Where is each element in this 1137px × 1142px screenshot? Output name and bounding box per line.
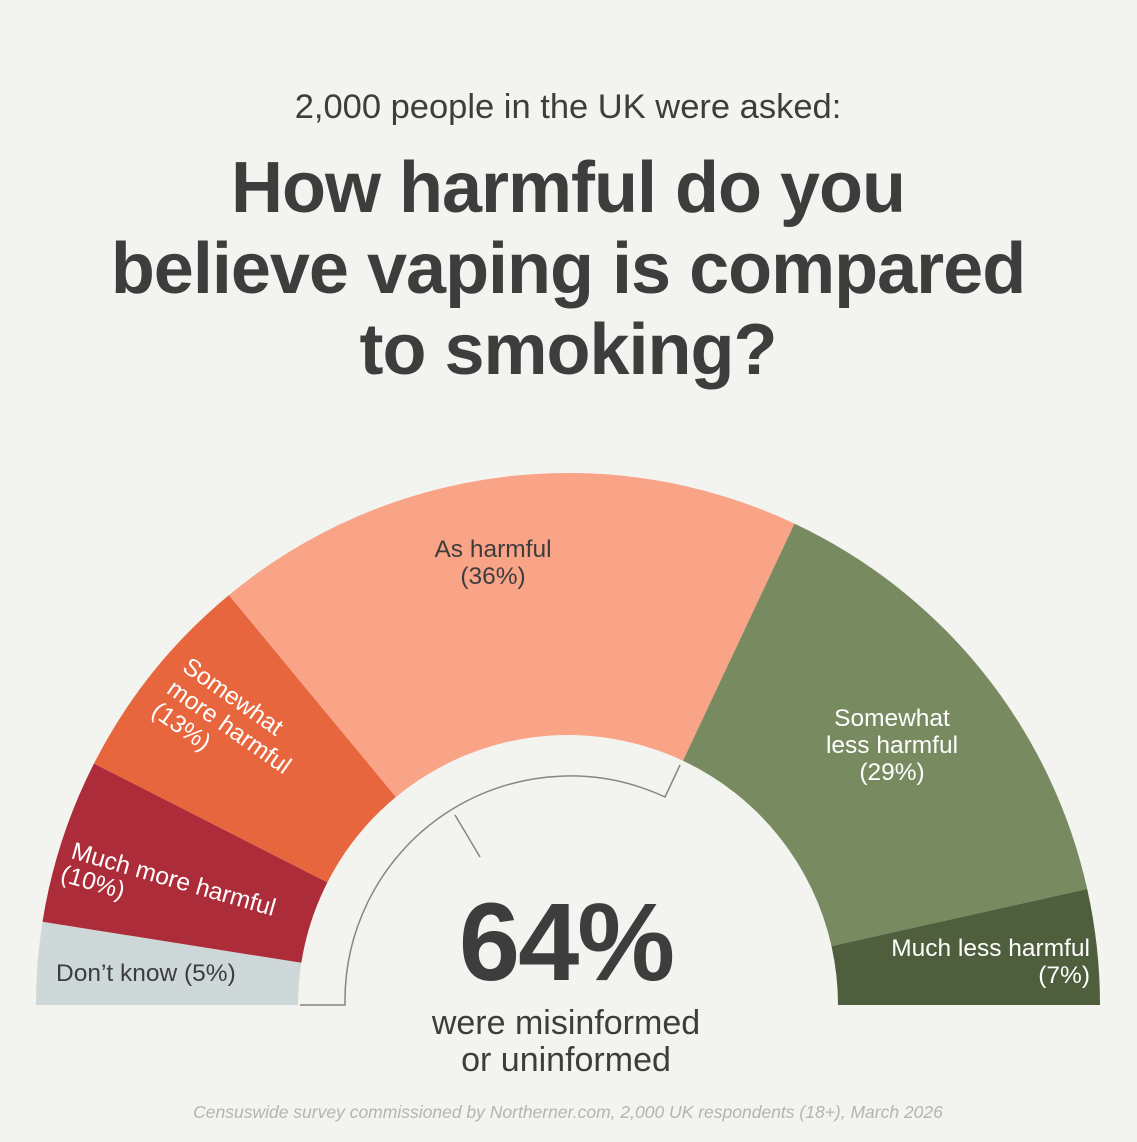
label: much less harmful: Much less harmful bbox=[891, 935, 1090, 962]
label: much less harmful: (7%) bbox=[1038, 962, 1090, 989]
label: somewhat more harmful: Somewhat bbox=[178, 653, 288, 741]
label: somewhat less harmful: (29%) bbox=[859, 759, 925, 786]
label: somewhat more harmful: more harmful bbox=[162, 675, 296, 780]
segment: somewhat less harmful bbox=[683, 524, 1087, 946]
segment: as harmful bbox=[229, 473, 794, 797]
stat caption: or uninformed bbox=[461, 1041, 671, 1079]
title: believe vaping is compared bbox=[111, 229, 1025, 309]
stat caption: were misinformed bbox=[431, 1004, 700, 1042]
label: somewhat more harmful: (13%) bbox=[147, 697, 216, 757]
bracket bbox=[300, 765, 680, 1005]
label: don't know: Don’t know (5%) bbox=[56, 960, 236, 987]
label: much more harmful: Much more harmful bbox=[68, 838, 279, 922]
title bbox=[111, 148, 1025, 390]
title: to smoking? bbox=[360, 310, 776, 390]
subtitle: 2,000 people in the UK were asked: bbox=[295, 88, 841, 126]
label: as harmful: As harmful bbox=[434, 536, 552, 563]
label: somewhat less harmful: Somewhat bbox=[834, 705, 950, 732]
label: somewhat more harmful bbox=[147, 653, 311, 802]
title: How harmful do you bbox=[231, 148, 905, 228]
label: somewhat less harmful: less harmful bbox=[826, 732, 958, 759]
label: as harmful: (36%) bbox=[460, 563, 526, 590]
label: much less harmful bbox=[891, 935, 1090, 989]
label: much more harmful: (10%) bbox=[58, 861, 128, 905]
stat caption bbox=[431, 1004, 700, 1079]
segment: much less harmful bbox=[832, 889, 1100, 1005]
segment: don't know bbox=[36, 922, 301, 1005]
label: somewhat less harmful bbox=[826, 705, 958, 786]
footnote: Censuswide survey commissioned by Northerner.com, 2,000 UK respondents (18+), March 2026 bbox=[193, 1102, 943, 1122]
label: as harmful bbox=[434, 536, 552, 590]
segment: much more harmful bbox=[42, 764, 327, 963]
big stat: 64% bbox=[459, 881, 673, 1004]
segment: somewhat more harmful bbox=[94, 595, 396, 882]
chart: semicircle donut bbox=[36, 473, 1100, 1005]
labels bbox=[56, 536, 1090, 989]
